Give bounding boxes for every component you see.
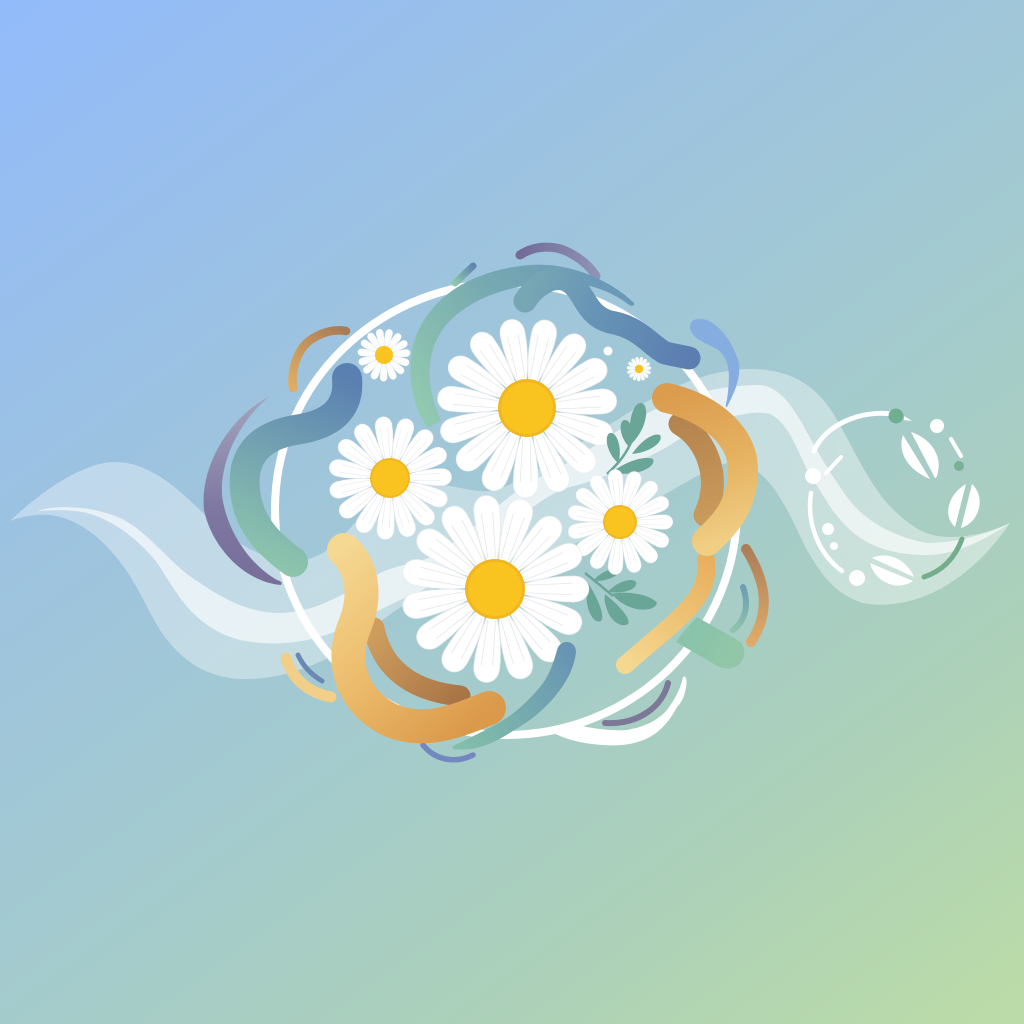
swoosh: light orange lower right	[625, 560, 707, 665]
arc: purple bottom right	[605, 683, 668, 723]
ribbon: inner bright band	[37, 385, 1010, 643]
wreath dot: left large	[805, 468, 821, 484]
swoosh: blue green S curve	[245, 378, 347, 562]
wreath dot: bottom	[849, 570, 865, 586]
daisy: left medium	[324, 412, 456, 544]
ribbon: flowing translucent wave	[10, 369, 1010, 679]
wreath dot: green right	[954, 461, 964, 471]
wreath: small white leaves and dots on right	[805, 408, 980, 586]
stub: green	[676, 617, 744, 668]
wave: blue	[525, 278, 689, 358]
stroke: small green to blue	[455, 266, 473, 283]
wreath arc: top	[814, 413, 892, 451]
wreath dot: left medium	[822, 523, 834, 535]
wreath leaf: bottom	[870, 555, 914, 586]
arc: brown top left	[292, 330, 346, 388]
swoosh: blue teal bottom	[452, 642, 576, 750]
wreath arc: left	[810, 493, 842, 571]
daisy: tiny top right	[627, 357, 651, 381]
arc: small teal right	[733, 587, 746, 630]
daisy: lower large	[401, 494, 589, 684]
wreath arc: green lower right	[924, 539, 962, 577]
arc: small blue bottom	[423, 745, 473, 760]
wreath dot: green top	[888, 408, 904, 424]
daisy: small top left	[357, 328, 411, 381]
wreath leaf: right	[948, 484, 980, 528]
crescent: brown lower left	[374, 628, 460, 696]
sprig: upper leaves	[607, 403, 661, 474]
swoosh: large orange right	[667, 398, 743, 541]
dot: small white	[604, 346, 612, 356]
crescent: white swoosh bottom right	[550, 677, 687, 745]
arc: purple left	[204, 396, 282, 585]
crescent: brown right inner	[680, 424, 712, 515]
wreath leaf: upper	[901, 432, 939, 479]
swoosh: large orange lower left	[344, 550, 489, 726]
wreath dot: white top right	[930, 419, 944, 433]
wreath mark: top wedge	[904, 416, 912, 421]
daisy: right medium	[567, 469, 673, 575]
sprig: lower leaves	[585, 569, 657, 625]
arc: brown right	[746, 549, 764, 642]
arc: large teal green swoosh	[410, 265, 634, 428]
ribbon: outer band	[10, 369, 1010, 679]
teardrop: light blue	[690, 319, 739, 407]
arc: small light orange lower left	[286, 658, 331, 697]
wreath mark: short left stroke	[826, 457, 841, 473]
wreath dot: left small	[830, 542, 838, 550]
wreath arc: short right	[951, 439, 961, 456]
white ring	[275, 283, 737, 735]
arc: small blue lower left	[298, 655, 322, 681]
arc: purple top	[520, 247, 596, 276]
daisy: upper large	[436, 317, 618, 498]
